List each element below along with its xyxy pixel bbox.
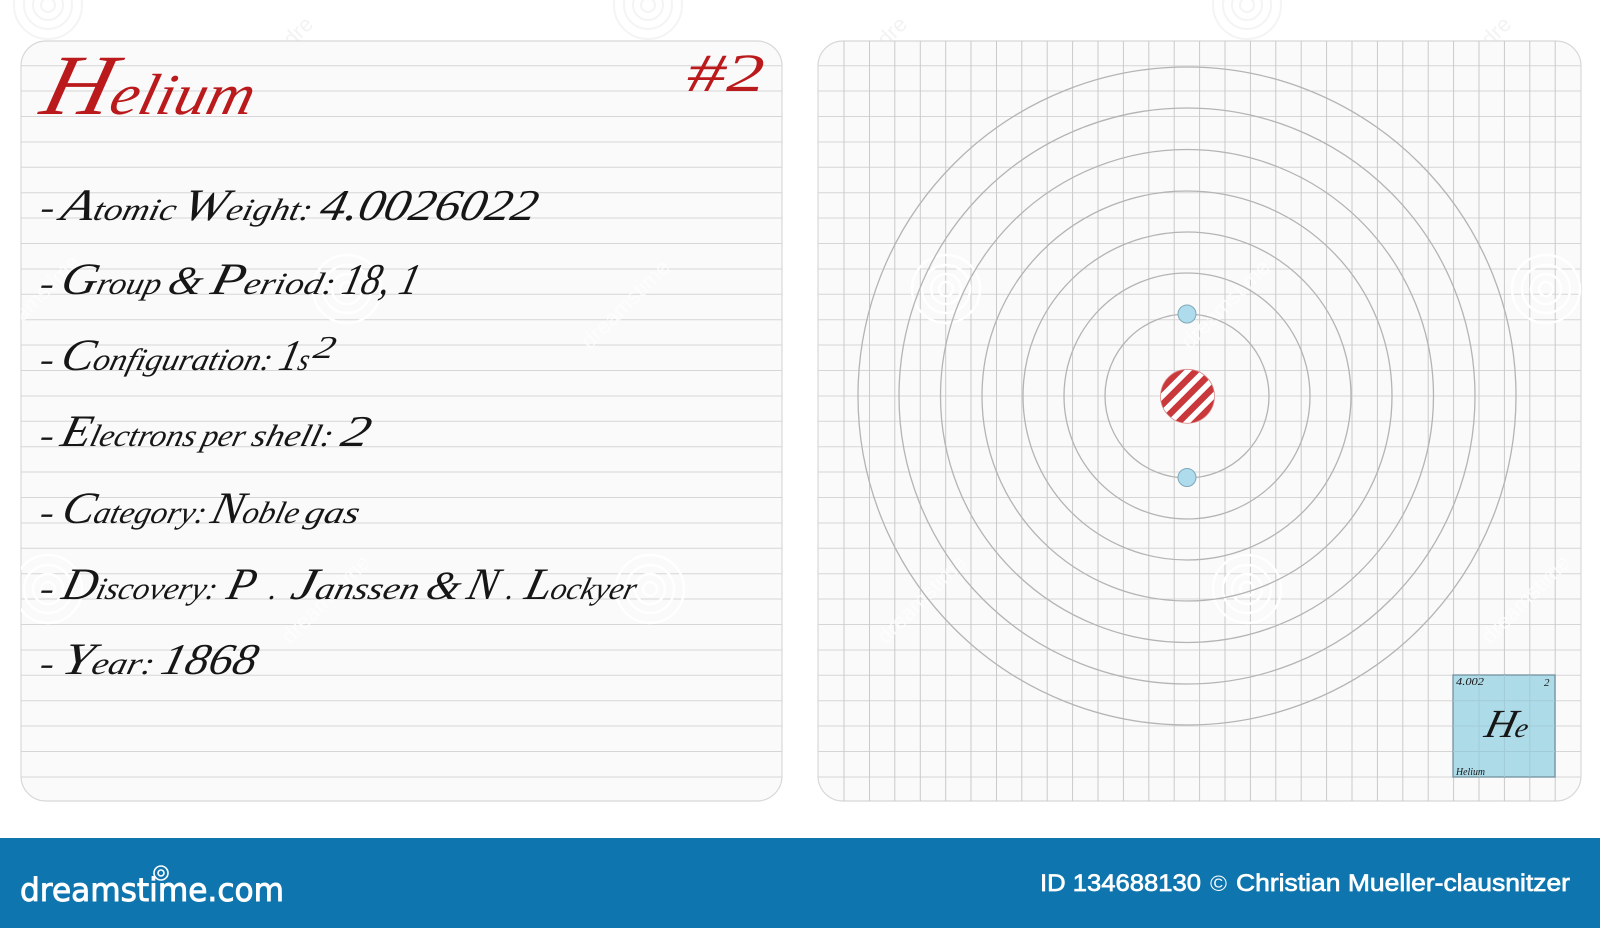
fact: configuration: 1s [275, 331, 317, 380]
fact: group and period: & [164, 259, 209, 303]
fact: category [36, 483, 367, 533]
outer watermark marks: dre [278, 11, 318, 52]
fact: discovery: . [266, 571, 283, 606]
fact: atomic weight: 4.0026022 [316, 181, 544, 230]
outer watermark marks [14, 0, 1516, 52]
nucleus [1160, 368, 1215, 424]
fact: discovery: N [462, 559, 508, 609]
fact: discovery: & [422, 564, 467, 608]
fact: electrons per shell: shell: [248, 418, 338, 453]
fact: category: - [36, 495, 59, 530]
outer watermark marks: dre [1476, 11, 1516, 52]
logo: dreamstime: dreamstime.com [20, 871, 284, 909]
outer watermark marks: dre [872, 11, 912, 52]
fact: discovery: . [503, 571, 520, 606]
credit line: ID 134688130 [1040, 870, 1201, 897]
heading: atomic number: #2 [687, 43, 765, 103]
element tile: He [1453, 675, 1555, 778]
fact: year: - [36, 646, 59, 681]
fact: discovery: - [36, 571, 59, 606]
credit line: © [1210, 871, 1227, 896]
footer banner [0, 838, 1600, 928]
credit line: Christian Mueller-clausnitzer [1236, 870, 1570, 897]
fact: discovery: Lockyer [520, 559, 645, 609]
panel: atom diagram: dreamstime [1176, 255, 1275, 354]
fact: electrons per shell [36, 406, 377, 456]
panel: element facts: dreamstime [576, 255, 675, 354]
fact: year: Year: [58, 634, 162, 684]
fact: electrons per shell: - [36, 418, 59, 453]
heading: element name: Helium [32, 37, 269, 133]
logo: spiral mark [154, 866, 168, 880]
fact: atomic weight: Atomic [53, 180, 184, 230]
fact: discovery: P [222, 559, 263, 609]
fact: atomic weight: Weight: [178, 180, 320, 230]
electron shells [858, 67, 1516, 725]
tile: symbol: He [1480, 702, 1535, 746]
fact: configuration: Configuration: [57, 330, 280, 380]
tile: atomic weight: 4.002 [1456, 676, 1485, 688]
panel: element facts: dreamstime [276, 550, 375, 649]
fact: electrons per shell: 2 [337, 407, 377, 456]
fact: year [36, 634, 264, 684]
fact: group and period: 18, 1 [338, 255, 426, 304]
fact: discovery [36, 559, 645, 609]
panel: atom diagram [818, 41, 1581, 801]
electron: top [1178, 305, 1196, 323]
panel: atom diagram: dreamstime [1476, 550, 1575, 649]
panel: atom diagram: dreamstime [872, 550, 971, 649]
fact: configuration: 2 [310, 330, 340, 366]
tile: name: Helium [1455, 767, 1485, 778]
panel: element facts [0, 37, 782, 801]
fact: discovery: Janssen [287, 559, 427, 609]
fact: category: Noble [206, 483, 307, 533]
fact: group and period: Period: [205, 254, 343, 304]
fact: category: gas [301, 495, 364, 530]
tile: atomic number: 2 [1544, 677, 1550, 689]
fact: electrons per shell: per [196, 418, 251, 453]
fact: configuration [36, 330, 340, 380]
fact: discovery: Discovery: [56, 559, 225, 609]
fact: configuration: - [36, 342, 59, 377]
fact: year: 1868 [157, 635, 264, 684]
fact: group and period [36, 254, 426, 304]
fact: group and period: - [36, 266, 59, 301]
credit line [1040, 870, 1570, 897]
electron: bottom [1178, 468, 1196, 486]
fact: atomic weight: - [37, 190, 59, 225]
fact: electrons per shell: Electrons [55, 406, 204, 456]
fact: group and period: Group [57, 254, 169, 304]
fact: atomic weight [36, 180, 544, 230]
fact: category: Category: [58, 483, 214, 533]
